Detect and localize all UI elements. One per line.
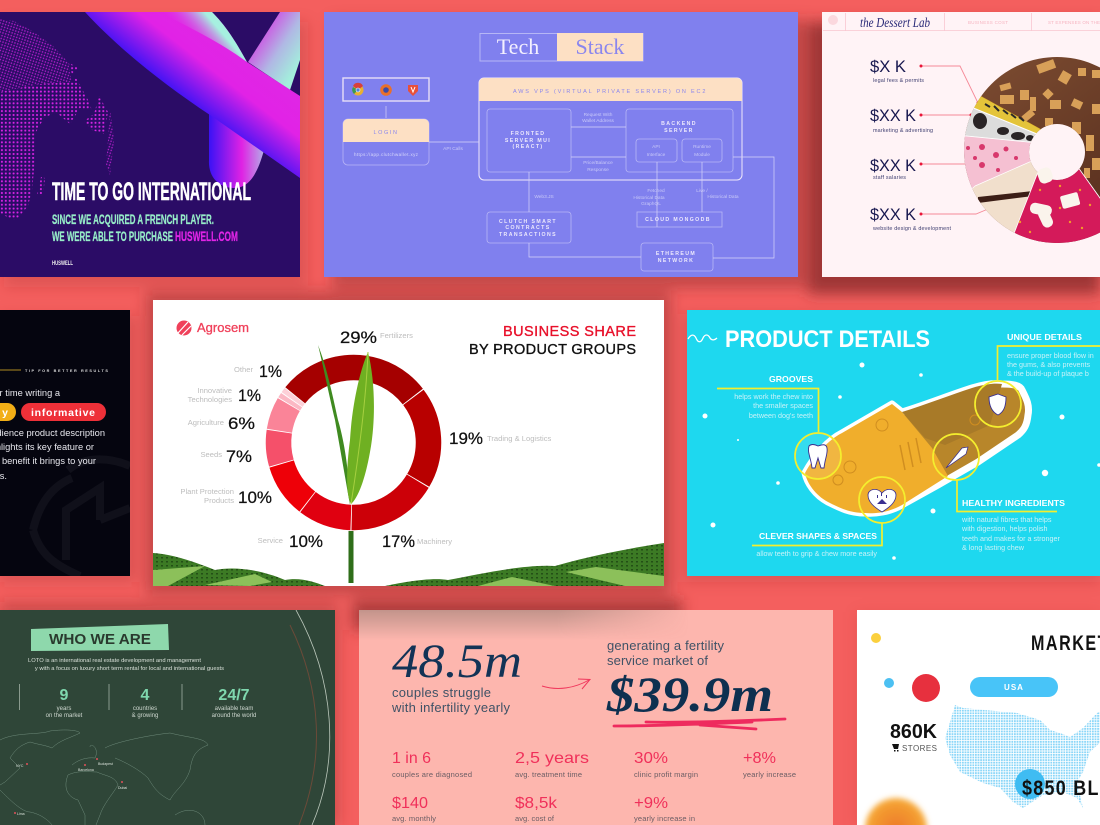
country pill — [970, 677, 1058, 697]
callout text: helps work the chew into — [734, 392, 813, 401]
stats captions: avg. monthly — [392, 814, 436, 823]
stats: around the world — [212, 713, 256, 719]
panel: market usa — [857, 610, 1100, 825]
connector notes: Request With — [584, 112, 613, 118]
callout headings: UNIQUE DETAILS — [1007, 332, 1082, 342]
percentage values: 1% — [238, 386, 261, 405]
chew product — [805, 384, 1029, 513]
percentage values: 6% — [228, 414, 255, 433]
yellow leader lines — [717, 346, 1100, 546]
value stat — [1015, 769, 1100, 800]
country pill: USA — [1004, 683, 1024, 692]
heading — [31, 624, 169, 651]
callout text: between dog's teeth — [749, 411, 813, 420]
diagram labels — [499, 121, 711, 264]
callout text: the gums, & also prevents — [1007, 360, 1091, 369]
aws vps — [479, 78, 742, 180]
header: the Dessert Lab — [860, 16, 930, 31]
connector notes: Live / — [696, 188, 708, 194]
title — [688, 330, 930, 347]
big figure: market: generating a fertility — [607, 638, 724, 653]
stats — [20, 684, 256, 719]
connector notes: Runtime — [693, 144, 711, 150]
percentage values: 19% — [449, 429, 483, 448]
big figure: couples — [391, 635, 522, 715]
cost labels: legal fees & permits — [873, 78, 924, 84]
stats captions: avg. cost of — [515, 814, 555, 823]
callout headings — [759, 332, 1082, 541]
subheading: HUSWELL.COM — [175, 229, 238, 244]
stats captions — [392, 770, 796, 823]
connector notes: Historical Data — [707, 194, 739, 200]
panel: tech stack — [324, 12, 798, 277]
plant — [318, 345, 374, 583]
fields — [153, 543, 664, 586]
title — [480, 33, 643, 61]
category labels: Other — [234, 365, 253, 374]
cost labels: $XX K — [870, 106, 917, 125]
body copy — [0, 388, 105, 481]
login: LOGIN — [373, 130, 399, 136]
header — [823, 13, 1100, 31]
login: https://app.clutchwallet.xyz — [354, 152, 419, 157]
diagram labels: SERVER — [664, 128, 694, 134]
cost labels: marketing & advertising — [873, 128, 933, 134]
callout text: teeth and makes for a stronger — [962, 534, 1060, 543]
arrow — [542, 679, 590, 689]
cost labels: staff salaries — [873, 175, 906, 181]
cost labels: $X K — [870, 57, 907, 76]
category labels: Trading & Logistics — [487, 434, 551, 443]
map labels: NYC — [16, 764, 24, 768]
donut illustration — [964, 57, 1100, 243]
stores stat: STORES — [902, 744, 937, 753]
percentage values: 29% — [340, 328, 377, 347]
donut chart — [266, 354, 442, 530]
tube shapes — [85, 12, 300, 188]
percentage values — [226, 328, 483, 551]
connector notes — [443, 112, 739, 207]
stats row 1: 2,5 years — [515, 750, 589, 767]
diagram labels: ETHEREUM — [656, 251, 696, 257]
big figure: market: $39.9m — [606, 666, 773, 722]
connector notes: Response — [587, 167, 609, 173]
pills — [0, 403, 106, 421]
connector notes: Historical Data — [633, 195, 665, 201]
stats captions: avg. treatment time — [515, 770, 582, 779]
dotted globe — [0, 19, 114, 220]
panel: tip for better results — [0, 310, 130, 576]
percentage values: 10% — [238, 488, 272, 507]
big figure: couples: 48.5m — [392, 635, 522, 688]
diagram boxes — [487, 109, 733, 271]
callout headings: GROOVES — [769, 374, 813, 384]
marshmallows — [1029, 166, 1081, 229]
connector notes: Interface — [647, 152, 666, 158]
panel: product details — [687, 310, 1100, 576]
percentage values: 17% — [382, 532, 415, 551]
tip header — [0, 370, 108, 372]
stats row 1: +8% — [743, 750, 776, 767]
map markers — [14, 758, 123, 814]
panel: fertility market — [359, 610, 833, 825]
stats captions: yearly increase in — [634, 814, 695, 823]
header: BUSINESS COST — [968, 20, 1008, 25]
callout text: & long lasting chew — [962, 543, 1025, 552]
world map — [0, 730, 208, 825]
stores stat: 860K — [890, 721, 938, 743]
stats row 1: $140 — [392, 795, 428, 812]
title: BUSINESS SHARE — [503, 324, 636, 340]
arcs — [296, 610, 330, 825]
map labels: Dubai — [118, 786, 127, 790]
percentage values: 7% — [226, 447, 252, 466]
panel: time to go international — [0, 12, 300, 277]
stats row 1: +9% — [634, 795, 668, 812]
big figure: couples: couples struggle — [392, 685, 491, 700]
callout text: with digestion, helps polish — [961, 524, 1048, 533]
diagram labels: TRANSACTIONS — [499, 232, 557, 238]
intro — [28, 658, 224, 672]
connector notes: Wallet Address — [582, 118, 615, 124]
diagram labels: SERVER MUI — [505, 138, 551, 144]
connector notes: GraphQL — [641, 201, 661, 207]
logo: Agrosem — [197, 321, 249, 335]
callout text: allow teeth to grip & chew more easily — [756, 549, 877, 558]
browsers — [343, 78, 429, 101]
category labels: Fertilizers — [380, 331, 413, 340]
leader lines — [920, 64, 990, 216]
stats: 9 — [60, 687, 69, 704]
map labels: Budapest — [98, 762, 113, 766]
connector notes: Web3.JS — [534, 194, 554, 200]
subheading: SINCE WE ACQUIRED A FRENCH PLAYER. — [52, 212, 214, 227]
panel: agrosem business share — [153, 300, 664, 586]
diagram labels: (REACT) — [512, 144, 544, 150]
cost labels: $XX K — [870, 205, 917, 224]
map labels — [16, 762, 127, 816]
cost labels: website design & development — [872, 226, 952, 232]
percentage values: 10% — [289, 532, 323, 551]
callout text: with natural fibres that helps — [961, 515, 1052, 524]
connector notes: API — [652, 144, 660, 150]
connector notes: Fetched — [647, 188, 665, 194]
panel: dessert lab — [822, 12, 1100, 277]
title — [470, 326, 636, 354]
subheading: WE WERE ABLE TO PURCHASE — [52, 229, 173, 244]
stats: countries — [133, 706, 157, 712]
intro: LOTO is an international real estate development and management — [28, 658, 201, 664]
login — [343, 106, 429, 165]
title: Tech — [497, 34, 539, 59]
stats captions: couples are diagnosed — [392, 770, 472, 779]
diagram labels: CLOUD MONGODB — [645, 217, 711, 223]
logo — [176, 320, 249, 336]
big figure: market — [606, 638, 785, 729]
title: Stack — [576, 34, 624, 59]
diagram labels: CLUTCH SMART — [499, 219, 557, 225]
title: BY PRODUCT GROUPS — [469, 342, 636, 358]
diagram labels: BACKEND — [661, 121, 697, 127]
category labels: Innovative — [197, 386, 232, 395]
connector notes: Price/Balance — [583, 160, 613, 166]
category labels: Machinery — [417, 537, 452, 546]
stats row 1: 1 in 6 — [392, 750, 431, 767]
stats captions: clinic profit margin — [634, 770, 698, 779]
category labels: Technologies — [188, 395, 232, 404]
headline: TIME TO GO INTERNATIONAL — [52, 178, 251, 206]
category labels: Service — [258, 536, 283, 545]
aws vps: AWS VPS (VIRTUAL PRIVATE SERVER) ON EC2 — [513, 89, 707, 95]
callout headings: CLEVER SHAPES & SPACES — [759, 531, 877, 541]
percentage values: 1% — [259, 362, 282, 381]
dots — [871, 633, 940, 702]
heading: WHO WE ARE — [49, 632, 151, 648]
dotted us map — [945, 705, 1100, 808]
cost labels: $XX K — [870, 156, 917, 175]
category labels: Agriculture — [188, 418, 224, 427]
callout text: & the build-up of plaque b — [1007, 369, 1089, 378]
stats row 1: 30% — [634, 750, 668, 767]
stats row 1 — [392, 750, 776, 812]
map labels: Lima — [17, 812, 25, 816]
big figure: market: service market of — [607, 653, 708, 668]
pills: informative — [31, 407, 95, 419]
diagram labels: NETWORK — [658, 258, 694, 264]
tip header: TIP FOR BETTER RESULTS — [25, 369, 109, 373]
stats: 4 — [141, 687, 150, 704]
stats: available team — [215, 706, 253, 712]
stats: years — [57, 706, 71, 712]
category labels: Products — [204, 496, 234, 505]
diagram labels: FRONTED — [511, 131, 545, 137]
stores stat — [890, 721, 938, 753]
map labels: Barcelona — [78, 768, 94, 772]
category labels — [180, 331, 551, 546]
pills: y — [2, 407, 8, 419]
diagram labels: CONTRACTS — [505, 225, 551, 231]
stars — [702, 362, 1100, 560]
intro: y with a focus on luxury short term rental for local and international guests — [35, 666, 224, 672]
big figure: couples: with infertility yearly — [391, 700, 510, 715]
header: ST EXPENSES ON THE — [1048, 20, 1100, 25]
category labels: Seeds — [200, 450, 222, 459]
stats: 24/7 — [218, 687, 250, 704]
callout text: ensure proper blood flow in — [1007, 351, 1094, 360]
connector notes: Module — [694, 152, 710, 158]
category labels: Plant Protection — [180, 487, 234, 496]
connector notes: API Calls — [443, 146, 463, 152]
callout text — [734, 351, 1094, 558]
stats: on the market — [46, 713, 83, 719]
callout headings: HEALTHY INGREDIENTS — [962, 498, 1065, 508]
subheading — [52, 214, 238, 242]
feature icons — [795, 381, 1021, 523]
logo watermark — [33, 459, 130, 576]
connectors — [429, 127, 774, 258]
panel: who we are — [0, 610, 335, 825]
stats row 1: $8,5k — [515, 795, 558, 812]
cost labels — [870, 57, 952, 232]
stats captions: yearly increase — [743, 770, 796, 779]
callout text: the smaller spaces — [753, 401, 813, 410]
title: PRODUCT DETAILS — [725, 326, 930, 353]
brand: HUSWELL — [52, 261, 73, 267]
orange blob — [865, 798, 927, 825]
stats: & growing — [132, 713, 158, 719]
